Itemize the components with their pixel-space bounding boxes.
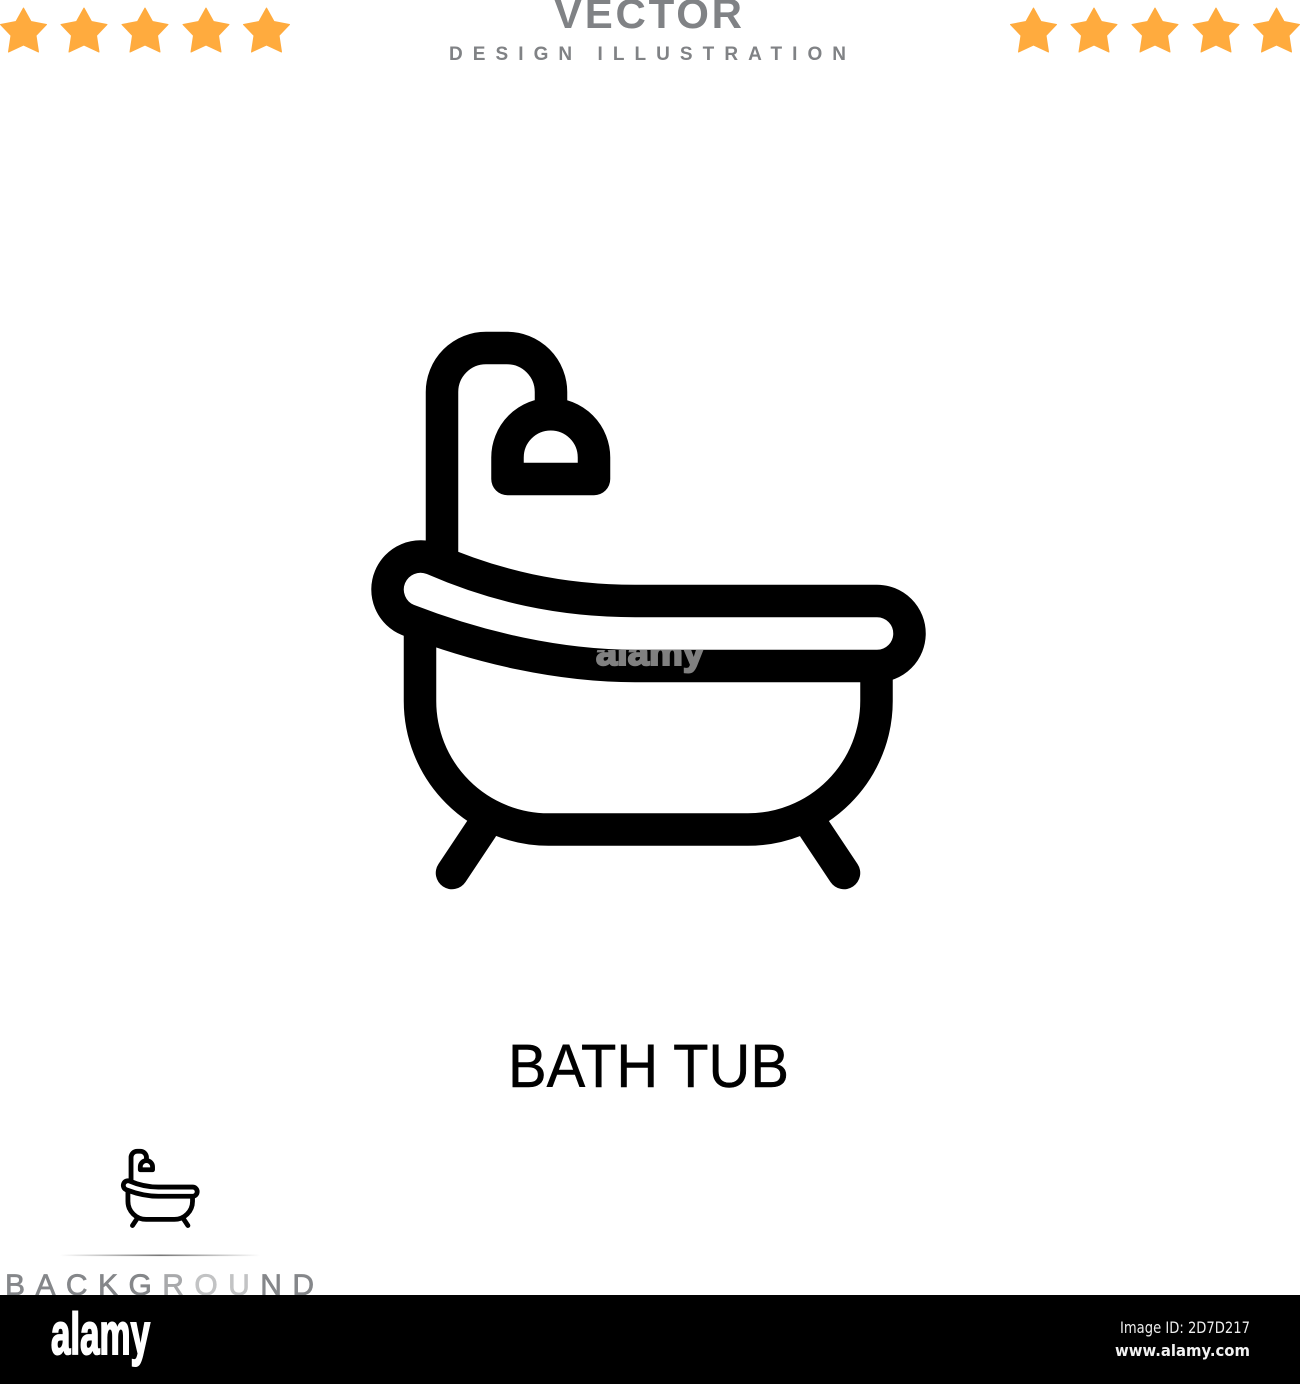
divider line [60,1254,260,1256]
tub rim [388,557,910,666]
right foot [814,828,844,873]
watermark: alamy fragment on rim: alamy [596,632,704,673]
left foot [452,828,482,873]
subheading: design illustration: DESIGN ILLUSTRATION [449,44,846,65]
text: image id: Image ID: 2D7D217 [1120,1318,1250,1337]
tub body [420,630,876,830]
text: website: www.alamy.com [1115,1341,1250,1360]
label: bath tub: BATH TUB [508,1032,789,1100]
label: background: BACKG R OU ND [5,1269,314,1302]
star rating: right [1010,8,1300,52]
footer band [0,1295,1300,1384]
icon: small bath tub [123,1151,197,1226]
icon: bath tub with shower [388,348,910,873]
star rating: left [0,8,290,52]
shower pipe [442,348,551,556]
logo: alamy: alamy [51,1302,150,1367]
shower head [508,414,594,479]
